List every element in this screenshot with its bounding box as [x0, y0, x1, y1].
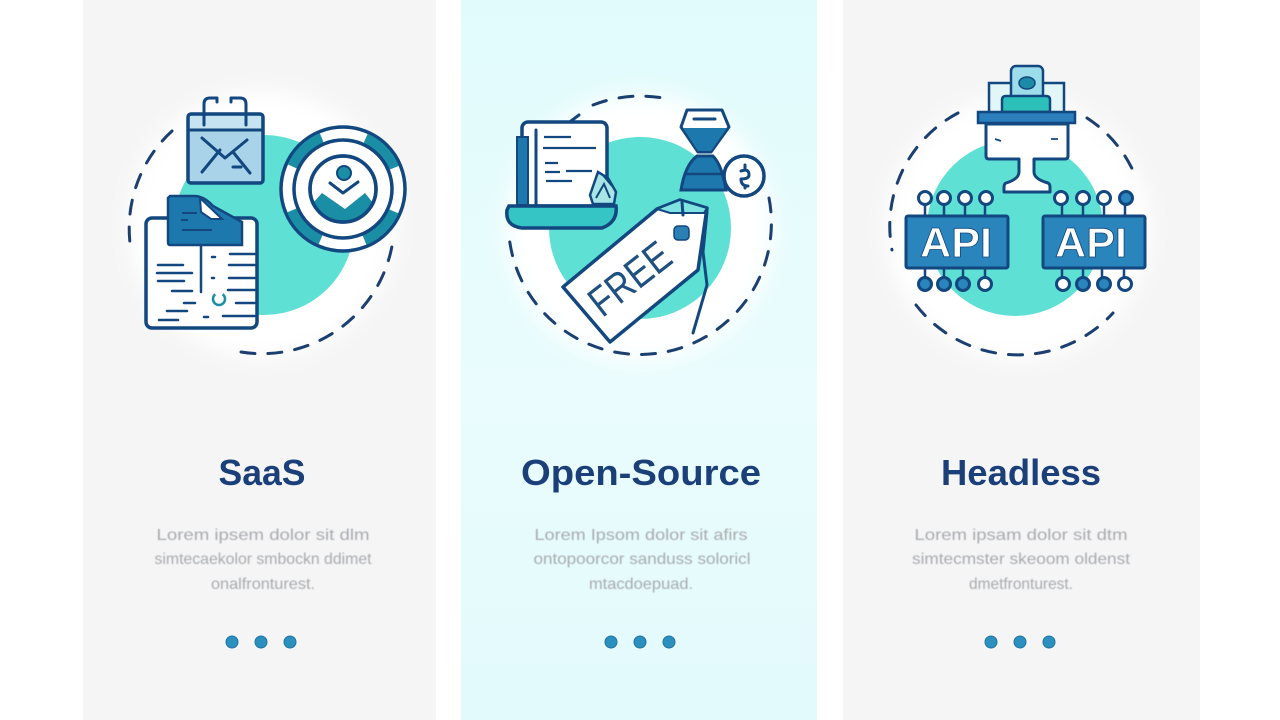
- dashed ring upper right: [1087, 118, 1135, 175]
- teal backdrop circle: [549, 137, 731, 319]
- icon: hourglass with coin: [681, 110, 764, 196]
- label: API: API: [1055, 219, 1127, 266]
- heading: SaaS: SaaS: [218, 452, 306, 493]
- pagination dots: [226, 636, 296, 648]
- icon: monitor with stack: [978, 66, 1075, 192]
- panel: Headless: [843, 0, 1200, 720]
- text block: Open-Source description: Lorem Ipsom dolor sit afirs: [534, 527, 748, 544]
- heading: Open-Source: Open-Source: [521, 452, 761, 493]
- dashed ring lower right: [241, 240, 393, 354]
- text block: SaaS description: [154, 527, 372, 593]
- label: API: API: [920, 219, 992, 266]
- text block: Open-Source description: mtacdoepuad.: [589, 576, 693, 593]
- pagination dots: [985, 636, 1055, 648]
- text block: Headless description: Lorem ipsam dolor sit dtm: [914, 527, 1128, 544]
- dashed ring lower: [510, 198, 771, 354]
- text block: Headless description: dmetfronturest.: [969, 576, 1073, 593]
- text block: SaaS description: onalfronturest.: [211, 576, 315, 593]
- text block: Open-Source description: ontopoorcor sanduss soloricl: [534, 551, 750, 568]
- tag label: FREE: [579, 232, 680, 325]
- icon: API module left: [906, 192, 1008, 290]
- text block: Headless description: simtecmster skeoom oldenst: [912, 551, 1131, 568]
- dashed ring left: [129, 131, 172, 243]
- dashed ring upper left: [890, 113, 958, 250]
- icon: API module right: [1043, 192, 1145, 290]
- panel: Open-Source: [461, 0, 817, 720]
- text block: SaaS description: Lorem ipsem dolor sit dlm: [156, 527, 370, 544]
- icon: document with folder: [146, 196, 257, 328]
- icon: calendar with envelope: [188, 98, 263, 183]
- icon: laptop: [507, 115, 616, 228]
- teal backdrop circle: [927, 140, 1103, 316]
- dashed ring lower: [916, 305, 1113, 355]
- text block: Headless description: [912, 527, 1131, 593]
- pagination dots: [605, 636, 675, 648]
- panel: SaaS: [83, 0, 436, 720]
- heading: Headless: Headless: [941, 452, 1101, 493]
- teal backdrop circle: [174, 135, 354, 315]
- dashed ring top: [593, 96, 668, 105]
- text block: Open-Source description: [534, 527, 750, 593]
- icon: chip badge: [281, 127, 405, 251]
- icon: FREE price tag: [563, 200, 707, 342]
- text block: SaaS description: simtecaekolor smbockn ddimet: [154, 551, 372, 568]
